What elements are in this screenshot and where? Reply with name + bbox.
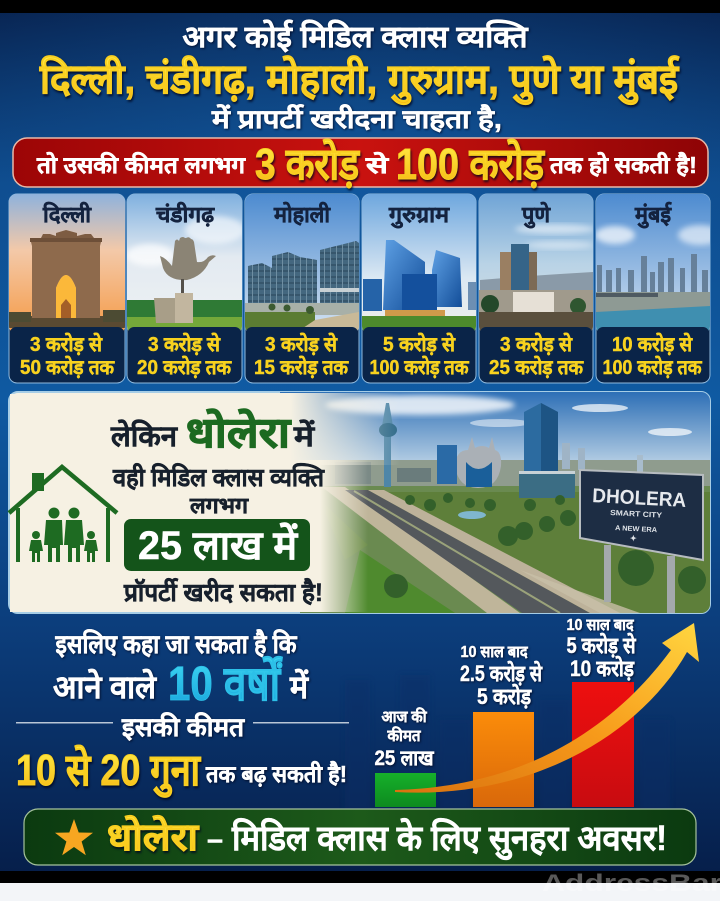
signboard: DHOLERA: A NEW ERA	[615, 525, 657, 534]
cream panel base	[10, 394, 320, 612]
Dholera text line 2: वही मिडिल क्लास व्यक्ति	[112, 463, 326, 492]
city name: Chandigarh: चंडीगढ़	[155, 201, 216, 227]
city name: Gurugram: गुरुग्राम	[388, 202, 450, 229]
text: in the next 10 years: 10 वर्षों	[168, 656, 283, 711]
icon: Mumbai skyline	[597, 254, 708, 296]
card: Gurugram	[362, 194, 476, 383]
city name: Delhi: दिल्ली	[42, 201, 92, 227]
icon: house with family	[9, 467, 117, 562]
park ground	[368, 492, 710, 613]
Dholera text line 4: प्रॉपर्टी खरीद सकता है!	[123, 578, 323, 607]
card: Mumbai	[595, 194, 720, 383]
card: Chandigarh	[126, 194, 245, 383]
bar: today	[374, 707, 436, 807]
bar: after 10 years, 2.5 to 5 crore	[460, 644, 543, 807]
cream fade: sky side	[280, 393, 400, 465]
Dholera text line 1: लेकिन	[110, 419, 178, 453]
price: Pune	[480, 327, 592, 382]
icon: star	[55, 819, 93, 855]
domed building	[455, 437, 501, 488]
city name: Pune: पुणे	[521, 201, 551, 229]
price: Pune: 25 करोड़ तक	[489, 355, 585, 379]
icon: Gurugram glass towers	[363, 240, 476, 311]
skyscraper	[524, 403, 558, 471]
icon: Pune towers and low-rise	[479, 244, 593, 314]
signboard: DHOLERA: DHOLERA	[592, 485, 687, 512]
bar: after 10 years, 2.5 to 5 crore: 2.5 करोड़ से	[460, 660, 543, 686]
text: its price with rules: इसकी कीमत	[121, 712, 245, 742]
price: Gurugram: 5 करोड़ से	[383, 332, 456, 356]
trees	[384, 493, 706, 598]
icon: Open Hand monument	[154, 237, 216, 323]
callout: golden opportunity	[24, 809, 696, 865]
price: Chandigarh	[128, 327, 241, 382]
bar: today: आज की	[382, 707, 427, 726]
arrow: rising value	[395, 623, 699, 793]
card: Delhi	[9, 194, 125, 383]
text: in the next 10 years	[53, 656, 310, 711]
chart: price growth bars	[374, 617, 699, 807]
price: Mohali	[246, 327, 358, 382]
icon: Mohali office towers	[245, 241, 359, 315]
icon: India Gate	[30, 230, 102, 318]
bar: after 10 years, 5 to 10 crore: 10 करोड़	[570, 655, 635, 681]
cream fade: ground side	[300, 460, 368, 612]
price: Delhi: 50 करोड़ तक	[20, 355, 116, 379]
banner connector: से	[365, 151, 390, 178]
bar: after 10 years, 2.5 to 5 crore: 10 साल बाद	[460, 644, 528, 661]
price: Chandigarh: 3 करोड़ से	[148, 332, 221, 356]
road	[345, 490, 590, 613]
callout highlight: धोलेरा	[107, 815, 199, 859]
callout text: मिडिल क्लास के लिए सुनहरा अवसर!	[231, 818, 667, 860]
heading line 3: में प्रापर्टी खरीदना चाहता है,	[211, 104, 502, 134]
price: Delhi: 3 करोड़ से	[30, 332, 103, 356]
Dholera text line 1: धोलेरा	[186, 408, 292, 456]
panel: growth forecast text	[16, 629, 349, 798]
panel: Dholera	[9, 392, 710, 613]
bar: after 10 years, 5 to 10 crore: 5 करोड़ से	[566, 632, 636, 658]
city name: Mumbai: मुंबई	[634, 201, 672, 229]
text: in the next 10 years: में	[289, 668, 310, 705]
price: Chandigarh: 20 करोड़ तक	[137, 355, 233, 379]
bar: today: कीमत	[387, 726, 421, 745]
price: Mohali: 15 करोड़ तक	[254, 355, 350, 379]
bar: after 10 years, 5 to 10 crore: 10 साल बाद	[566, 617, 634, 634]
city name: Mohali: मोहाली	[273, 201, 331, 227]
heading block	[39, 19, 680, 134]
card: Mohali	[245, 194, 359, 383]
signboard: DHOLERA	[580, 470, 703, 560]
callout dash: –	[207, 823, 223, 856]
bar: today: 25 लाख	[374, 747, 434, 770]
heading line 1: अगर कोई मिडिल क्लास व्यक्ति	[182, 19, 529, 54]
price range banner	[13, 138, 708, 189]
Dholera city illustration	[280, 392, 710, 613]
card: Pune	[479, 194, 595, 383]
panel: city cards	[9, 194, 720, 383]
text: 10 to 20 times: तक बढ़ सकती है!	[205, 760, 347, 787]
heading line 2: cities: दिल्ली, चंडीगढ़, मोहाली, गुरुग्राम, पुणे या मुंबई	[39, 55, 680, 105]
text: in the next 10 years: आने वाले	[53, 668, 157, 705]
signboard posts	[604, 545, 611, 602]
Dholera text line 1	[110, 408, 316, 456]
tower	[382, 403, 393, 487]
signboard: DHOLERA: ✦	[630, 534, 637, 543]
bar: after 10 years, 2.5 to 5 crore: 5 करोड़	[477, 683, 532, 709]
signboard: DHOLERA: SMART CITY	[610, 508, 662, 520]
banner lead text: तो उसकी कीमत लगभग	[36, 151, 246, 178]
price: Mumbai: 10 करोड़ से	[612, 332, 693, 356]
price: Gurugram	[363, 327, 475, 382]
Dholera text line 3: लगभग	[189, 493, 250, 518]
price: Pune: 3 करोड़ से	[500, 332, 573, 356]
price: Mohali: 3 करोड़ से	[265, 332, 338, 356]
text: therefore it can be said: इसलिए कहा जा सकता है कि	[55, 629, 297, 659]
text: 10 to 20 times	[16, 744, 347, 798]
price: Mumbai	[597, 327, 709, 382]
price: Gurugram: 100 करोड़ तक	[370, 355, 470, 379]
price badge: 25 lakh: 25 लाख में	[138, 522, 299, 568]
banner tail text: तक हो सकती है!	[549, 151, 697, 178]
bar: after 10 years, 5 to 10 crore	[566, 617, 636, 807]
price: Delhi	[10, 327, 124, 382]
text: 10 to 20 times: 10 से 20 गुना	[16, 744, 201, 798]
banner amount: 100 crore: 100 करोड़	[396, 138, 545, 189]
watermark: AddressBar	[542, 870, 720, 897]
Dholera text line 1: में	[293, 419, 316, 453]
banner amount: 3 crore: 3 करोड़	[255, 138, 360, 189]
price: Mumbai: 100 करोड़ तक	[602, 355, 703, 379]
